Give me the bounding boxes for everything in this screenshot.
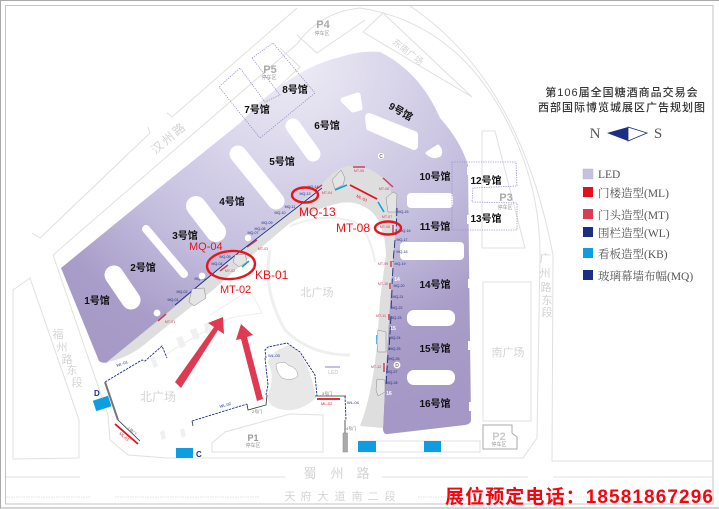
- MQ labels: MQ-04: [212, 262, 222, 266]
- hall labels: 1号馆: [84, 294, 110, 307]
- MT labels: MT-09: [378, 262, 388, 266]
- MT labels: [165, 169, 392, 369]
- hall labels: 9号馆: [386, 99, 415, 123]
- red callout labels: MQ-04: [189, 241, 223, 253]
- north plaza: 北广场: [300, 285, 334, 299]
- MQ labels: MQ-18: [397, 250, 407, 254]
- MT door frames: [158, 167, 393, 372]
- gate labels: 3号门: [322, 390, 332, 396]
- MQ labels: MQ-17: [397, 238, 407, 242]
- compass: S: [654, 126, 662, 142]
- MQ labels: MQ-05: [220, 255, 230, 259]
- road names: 段: [542, 305, 552, 319]
- road names: 段: [384, 489, 396, 503]
- legend: 门头造型(MT): [598, 208, 669, 222]
- hall labels: 13号馆: [470, 212, 502, 225]
- red callout labels: MT-08: [336, 221, 370, 235]
- road names: 蜀: [303, 466, 317, 481]
- MQ labels: MQ-03: [195, 277, 205, 281]
- MQ labels: MQ-28: [387, 381, 397, 385]
- blue billboards C and D: [93, 389, 441, 459]
- road names: 路: [62, 353, 72, 366]
- red guide arrows: [175, 317, 263, 401]
- ML gantries: ML-02: [321, 401, 333, 406]
- gate labels: 1号门: [126, 425, 138, 436]
- MT labels: MT-02: [225, 269, 235, 273]
- white hall gaps: [114, 95, 472, 411]
- MQ labels: MQ-20: [394, 284, 404, 288]
- hall labels: 15号馆: [419, 342, 451, 355]
- road names: 东: [542, 294, 552, 307]
- road names: 路: [356, 466, 370, 481]
- MT labels: MT-01: [165, 320, 175, 324]
- compass: [590, 126, 662, 142]
- MT labels: MT-04: [322, 191, 332, 195]
- hall labels: 2号馆: [130, 261, 156, 274]
- hall labels: 8号馆: [282, 83, 308, 96]
- north plaza: [140, 218, 375, 440]
- title: 第106届全国糖酒商品交易会: [545, 85, 699, 99]
- north plaza: LED: [328, 370, 338, 376]
- road names: 南广场: [492, 345, 524, 359]
- hall labels: 4号馆: [219, 195, 245, 208]
- road names: 大: [318, 489, 328, 503]
- hall labels: 10号馆: [419, 170, 451, 183]
- legend: 围栏造型(WL): [598, 226, 670, 240]
- red callout labels: MT-02: [220, 284, 251, 296]
- compass: N: [590, 126, 601, 142]
- parking area P2: 停车区: [491, 441, 507, 448]
- MQ labels: MQ-22: [392, 306, 402, 310]
- road names: 福: [52, 327, 64, 341]
- MT labels: MT-03: [258, 247, 268, 251]
- dashed halls 7, 8, 12 and 13: [219, 43, 517, 230]
- parking labels: 停车区: [245, 442, 261, 449]
- MQ labels: MQ-16: [400, 229, 410, 233]
- numbered entry markers: D: [395, 363, 399, 369]
- road names: 路: [540, 281, 552, 294]
- MQ labels: MQ-24: [390, 336, 400, 340]
- road names: 道: [334, 489, 346, 503]
- legend: LED: [598, 169, 620, 181]
- hall labels: 16号馆: [419, 397, 451, 410]
- MT labels: MT-08: [380, 225, 390, 229]
- parking labels: P5: [263, 64, 277, 76]
- road names: [52, 36, 552, 503]
- road names: 二: [368, 491, 378, 503]
- KB billboards on concourse: [242, 185, 384, 344]
- MQ labels: MQ-02: [177, 290, 187, 294]
- title: [538, 85, 706, 114]
- MT labels: MT-06: [379, 187, 389, 191]
- MQ labels: MQ-08: [255, 227, 265, 231]
- blue billboards C and D: C: [196, 450, 202, 459]
- road names: 东: [66, 364, 78, 377]
- numbered entry markers: 15: [390, 326, 396, 332]
- legend: [583, 169, 693, 283]
- hall labels: 11号馆: [420, 220, 450, 233]
- red callout labels: MQ-13: [299, 205, 336, 219]
- MQ labels: MQ-23: [391, 316, 401, 320]
- road names: 段: [72, 375, 82, 389]
- road names: 汉州路: [148, 118, 190, 157]
- grey concourse band: [107, 166, 396, 428]
- road names: 广: [540, 252, 550, 265]
- legend: 玻璃幕墙布幅(MQ): [598, 269, 693, 283]
- kiosks: [189, 170, 397, 396]
- MT labels: MT-07: [382, 215, 392, 219]
- MQ labels: MQ-11: [285, 205, 295, 209]
- blue billboards C and D: D: [94, 389, 100, 398]
- MT labels: MT-10: [378, 282, 388, 286]
- hall labels: 5号馆: [269, 155, 295, 168]
- MT labels: MT-11: [376, 314, 386, 318]
- numbered entry markers: 16: [386, 391, 392, 397]
- legend: 看板造型(KB): [598, 247, 668, 261]
- MQ labels: MQ-10: [275, 211, 285, 215]
- road names: 州: [330, 466, 344, 481]
- fence labels: [116, 353, 360, 409]
- numbered entry markers: 14: [394, 277, 400, 283]
- MT labels: MT-05: [354, 169, 364, 173]
- MQ labels: MQ-09: [262, 221, 272, 225]
- parking labels: [245, 19, 513, 449]
- hall labels: 14号馆: [419, 278, 451, 291]
- MQ labels: MQ-13: [300, 192, 310, 196]
- ML gantries: ML-03: [356, 193, 369, 203]
- hall labels: 7号馆: [244, 103, 270, 116]
- parking labels: P4: [316, 19, 331, 31]
- MQ labels: [168, 185, 410, 385]
- road names: 南: [352, 490, 362, 503]
- MQ labels: MQ-27: [387, 370, 397, 374]
- booking phone: 展位预定电话：18581867296: [445, 485, 714, 508]
- road names: 州: [540, 268, 550, 280]
- hall labels: [84, 83, 502, 410]
- red callout labels: [189, 205, 370, 296]
- ML gantries: ML-01: [118, 431, 131, 443]
- parking area P2: P2: [492, 431, 506, 443]
- hall labels: 6号馆: [314, 119, 340, 132]
- MQ labels: MQ-19: [395, 262, 405, 266]
- MQ labels: MQ-21: [393, 295, 403, 299]
- north plaza: 北广场: [140, 390, 176, 404]
- fence labels: WL-03: [268, 353, 281, 358]
- parking labels: 停车区: [497, 204, 513, 211]
- road names: 州: [56, 342, 68, 354]
- red callout labels: KB-01: [255, 268, 289, 282]
- title: 西部国际博览城展区广告规划图: [538, 100, 706, 114]
- gate lines: [105, 382, 348, 452]
- fence labels: WL-01: [116, 359, 129, 368]
- ML gantries: [115, 185, 377, 444]
- MQ labels: MQ-01: [168, 298, 178, 302]
- road names: 府: [300, 489, 312, 503]
- MQ labels: MQ-26: [389, 357, 399, 361]
- MQ labels: MQ-14: [308, 185, 318, 189]
- parking labels: P1: [247, 433, 259, 443]
- road names: 天: [284, 491, 296, 503]
- gate labels: [126, 390, 356, 436]
- hall labels: 3号馆: [172, 229, 198, 242]
- MQ labels: MQ-07: [248, 231, 258, 235]
- MQ labels: MQ-15: [398, 210, 408, 214]
- parking labels: P3: [499, 192, 513, 204]
- hall labels: 12号馆: [470, 174, 502, 187]
- road names: 东南广场: [391, 36, 426, 67]
- MQ glass wall line: [175, 188, 397, 385]
- red highlight ellipses: [206, 188, 401, 281]
- numbered entry markers: [154, 152, 400, 397]
- gate labels: 4号门: [346, 425, 356, 431]
- MT labels: MT-12: [371, 365, 381, 369]
- purple exhibition halls: [61, 52, 471, 434]
- MQ labels: MQ-25: [390, 347, 400, 351]
- legend: 门楼造型(ML): [598, 186, 669, 200]
- fence labels: WL-02: [219, 401, 232, 409]
- pond area: [267, 345, 316, 410]
- numbered entry markers: C: [379, 154, 383, 160]
- parking labels: 停车区: [261, 74, 277, 81]
- parking labels: 停车区: [314, 30, 330, 37]
- fence WL segments: [105, 343, 346, 421]
- fence labels: WL-04: [347, 400, 360, 405]
- parking area P2: [483, 425, 517, 449]
- gate labels: 2号门: [252, 408, 262, 414]
